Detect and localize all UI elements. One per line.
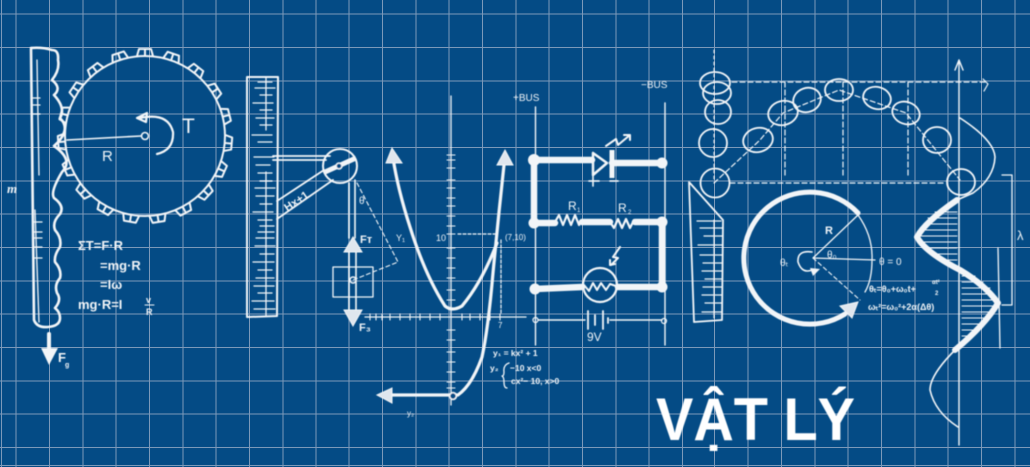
torque equations — [78, 238, 154, 317]
resistors R1 and R2 — [555, 199, 637, 228]
battery 9V — [533, 311, 666, 344]
arrow: gravity force: F — [58, 350, 66, 365]
resistors R1 and R2: 2 — [628, 210, 632, 216]
hanging mass with force arrows: Y₁ — [396, 233, 405, 243]
ball trajectory arc — [714, 79, 988, 195]
letter y: parabola curve with arrow — [386, 148, 497, 309]
letter h: arm and pulley — [273, 149, 357, 219]
torque equations: =mg·R — [100, 258, 141, 273]
rotation equations: αt² — [932, 279, 940, 286]
torque equations: mg·R=I — [78, 297, 122, 312]
letter y: graph axes: 7 — [498, 321, 503, 330]
letter C: rotation arc: θₜ — [780, 258, 789, 269]
letter y: graph axes: (7,10) — [505, 233, 526, 242]
resistors R1 and R2: 1 — [577, 208, 581, 214]
photoresistor — [583, 247, 620, 302]
torque equations: =Iω — [100, 277, 122, 292]
letter y: graph axes: 10 — [436, 233, 446, 243]
letter C: rotation arc: θ = 0 — [879, 257, 902, 268]
letter S: sine wave — [917, 60, 1024, 445]
torque equations: R — [146, 307, 153, 317]
letter E: thick circuit wires — [528, 154, 668, 294]
rotation equations: 2 — [935, 291, 939, 297]
letter y: piecewise curve with arrow: y₂ — [407, 409, 414, 418]
hanging mass with force arrows: θ — [359, 196, 365, 207]
letter h: arm and pulley: Hx+1 — [282, 189, 311, 214]
torque equations: ΣT=F·R — [78, 238, 124, 253]
rotation equations: θₜ=θ₀+ω₀t+ — [869, 284, 916, 294]
letter P: gear wheel — [58, 49, 232, 223]
letter h: ruler with ticks — [247, 77, 278, 317]
letter y: graph axes — [365, 96, 526, 405]
graph equations: cx²− 10, x>0 — [511, 376, 559, 386]
label: R: R — [102, 148, 113, 165]
letter E: circuit bus lines: −BUS — [641, 80, 668, 91]
torque equations: v — [146, 295, 151, 305]
graph equations: y₂ — [490, 363, 499, 373]
letter S: sine wave: λ — [1017, 228, 1024, 243]
rotation equations: ωₜ²=ω₀²+2α(Δθ) — [868, 302, 934, 312]
rotation equations — [868, 279, 940, 312]
hanging mass with force arrows: Fт — [360, 234, 373, 246]
title: VẬT LÝ: VẬT LÝ — [656, 386, 855, 453]
letter I: slanted ruler — [689, 182, 723, 322]
letter y: piecewise curve with arrow — [377, 150, 513, 418]
letter C: rotation arc: θ₀ — [827, 250, 837, 261]
label: m: m — [7, 181, 17, 196]
label: torque: T — [182, 115, 195, 138]
resistors R1 and R2: R — [568, 199, 577, 213]
letter C: rotation arc — [744, 192, 902, 324]
letter P: toothed rack — [7, 48, 66, 327]
battery 9V: 9V — [587, 330, 602, 344]
letter E: circuit bus lines: +BUS — [513, 93, 540, 104]
graph equations: y₁ = kx² + 1 — [493, 348, 538, 358]
graph equations — [490, 348, 559, 388]
arrow: gravity force: g — [65, 362, 69, 369]
graph equations: −10 x<0 — [510, 363, 541, 373]
hanging mass with force arrows — [333, 180, 405, 334]
letter E: circuit bus lines — [513, 80, 668, 345]
resistors R1 and R2: R — [618, 201, 627, 215]
letter C: rotation arc: R — [825, 225, 833, 237]
hanging mass with force arrows: F₃ — [359, 322, 371, 334]
letter I: stacked ball positions — [699, 50, 731, 198]
LED symbol — [589, 135, 630, 186]
arrow: gravity force — [41, 334, 69, 369]
